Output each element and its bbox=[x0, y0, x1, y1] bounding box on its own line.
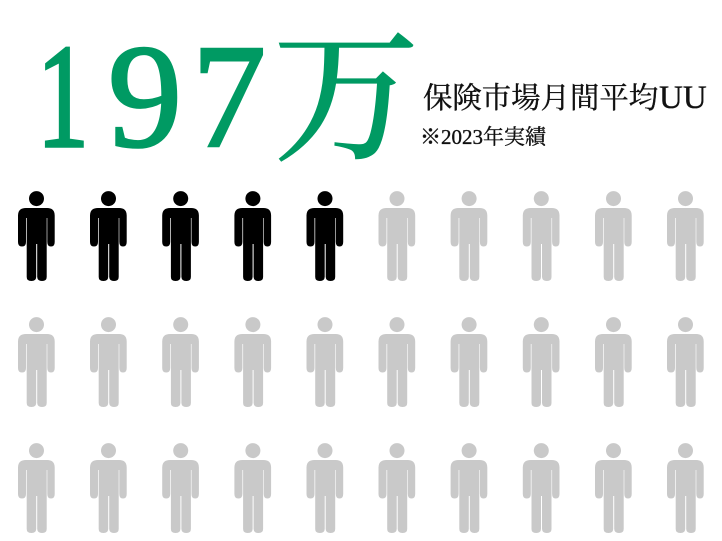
note: 2023 results: ※2023年実績 bbox=[420, 125, 548, 149]
title: 197万: 9 bbox=[108, 15, 182, 179]
title: 197万: 1 bbox=[37, 14, 89, 178]
title: 197万: 7 bbox=[192, 15, 266, 179]
pictogram grid: row 3 bbox=[18, 443, 704, 533]
pictogram grid: row 2 bbox=[18, 317, 704, 407]
label: monthly average UU: 保険市場月間平均 bbox=[423, 82, 658, 115]
pictogram grid: row 1 bbox=[18, 191, 704, 281]
title: 197万 bbox=[37, 0, 419, 191]
label: monthly average UU: UU bbox=[659, 80, 707, 116]
